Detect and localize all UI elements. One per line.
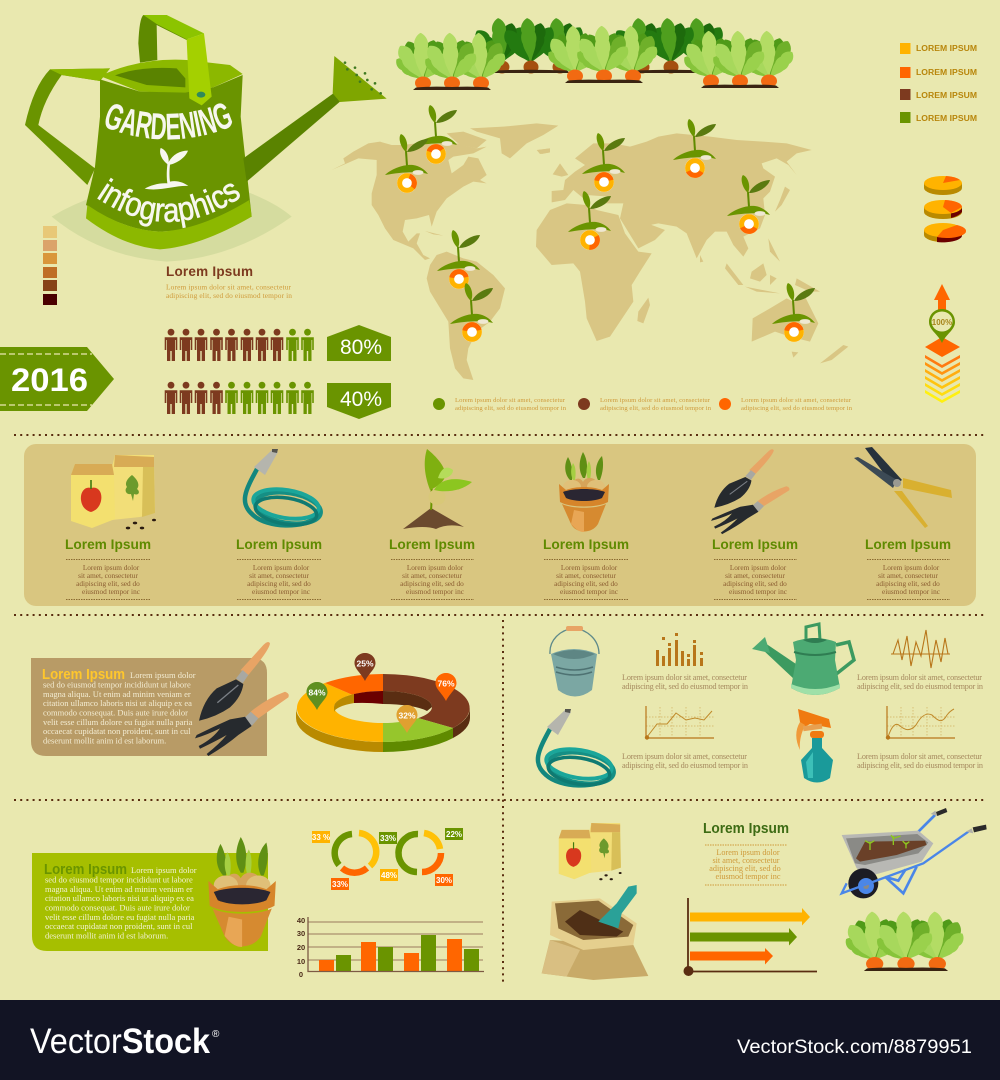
banner: 2016: 2016 bbox=[11, 362, 88, 398]
text block: lorem ipsum brown: Lorem ipsum dolor sit amet, consectetur bbox=[166, 282, 292, 292]
text: row 2 column 2: adipiscing elit, sed do eiusmod tempor in bbox=[857, 761, 983, 770]
footer bar: VectorStock.com/8879951 bbox=[737, 1037, 972, 1058]
gauge arrow with 100% pin: 100% bbox=[932, 318, 952, 327]
map legend: adipiscing elit, sed do eiusmod tempor in bbox=[741, 405, 853, 412]
label group 1: adipiscing elit, sed do bbox=[76, 579, 140, 588]
panel: brown text card: Lorem Ipsum bbox=[42, 667, 125, 683]
label group 1 bbox=[65, 536, 151, 600]
banner: 2016 bbox=[0, 347, 114, 411]
chart: mini zigzag line bbox=[891, 630, 950, 668]
panel: green text card: deserunt mollit anim id est laborum. bbox=[45, 930, 168, 940]
panel: brown text card: commodo consequat. Duis aute irure dolor bbox=[43, 708, 188, 718]
map legend: Lorem ipsum dolor sit amet, consectetur bbox=[741, 397, 852, 404]
icon: seed packets small bbox=[559, 823, 622, 880]
tag: 30% orange: 30% bbox=[436, 876, 452, 885]
chart: bar chart: 30 bbox=[297, 929, 305, 938]
panel: green text card: occaecat cupidatat non proident, sunt in cul bbox=[45, 921, 193, 931]
map legend: adipiscing elit, sed do eiusmod tempor in bbox=[600, 405, 712, 412]
text: row 2 column 1 bbox=[622, 752, 748, 770]
icon: trowel and fork large bbox=[195, 642, 289, 756]
text: row 1 column 2: adipiscing elit, sed do eiusmod tempor in bbox=[857, 682, 983, 691]
label group 6 bbox=[865, 536, 951, 600]
legend: colour key: LOREM IPSUM bbox=[916, 113, 977, 123]
heading: lorem ipsum centre bbox=[703, 821, 789, 885]
pin: 25% bbox=[354, 653, 376, 681]
text: row 1 column 1: adipiscing elit, sed do eiusmod tempor in bbox=[622, 682, 748, 691]
text: row 1 column 2 bbox=[857, 673, 983, 691]
label group 2 bbox=[236, 536, 322, 600]
icon: watering can with title: GARDENING bbox=[106, 103, 232, 140]
icon: potted bulbs large bbox=[208, 837, 276, 947]
label group 4: Lorem ipsum dolor bbox=[561, 563, 618, 572]
chart: bar chart bbox=[297, 916, 484, 979]
text: row 2 column 1: Lorem ipsum dolor sit amet, consectetur bbox=[622, 752, 747, 761]
icon: garden hose small bbox=[538, 709, 616, 789]
tag: 22% green: 22% bbox=[446, 830, 462, 839]
map legend bbox=[433, 397, 853, 412]
gauge arrow with 100% pin bbox=[925, 284, 960, 403]
stacked 3D pies bbox=[924, 176, 966, 242]
panel: green text card bbox=[32, 853, 268, 951]
label group 5: Lorem ipsum dolor bbox=[730, 563, 787, 572]
pictogram row 40% bbox=[165, 382, 391, 419]
text: row 1 column 2: Lorem ipsum dolor sit amet, consectetur bbox=[857, 673, 982, 682]
chart: arrow bars bbox=[684, 898, 817, 976]
panel: green text card: Lorem ipsum dolor bbox=[131, 865, 197, 875]
text block: lorem ipsum brown: Lorem Ipsum bbox=[166, 264, 253, 279]
label group 3: sit amet, consectetur bbox=[402, 571, 462, 580]
icon: garden hose bbox=[245, 449, 323, 529]
label group 3: Lorem ipsum dolor bbox=[407, 563, 464, 572]
heading: lorem ipsum centre: eiusmod tempor inc bbox=[715, 872, 781, 881]
footer bar: VectorStock bbox=[30, 1022, 210, 1061]
label group 5 bbox=[712, 536, 798, 600]
pin: 84%: 84% bbox=[308, 688, 326, 698]
label group 4: eiusmod tempor inc bbox=[560, 587, 619, 596]
pin: 84% bbox=[306, 682, 328, 710]
icon: trowel and fork bbox=[711, 449, 789, 534]
chart: bar chart: 10 bbox=[297, 957, 305, 966]
world map bbox=[332, 123, 848, 380]
tag: 33 % yellow: 33 % bbox=[312, 833, 330, 842]
icon: green watering can bbox=[752, 624, 854, 695]
pin: 76% bbox=[436, 673, 456, 701]
pin: 32% bbox=[396, 705, 418, 733]
icon: wheelbarrow bbox=[842, 808, 987, 898]
label group 3: eiusmod tempor inc bbox=[406, 587, 465, 596]
tag: 48% yellow: 48% bbox=[381, 871, 397, 880]
map sprout markers bbox=[385, 105, 815, 342]
chart: progress ring left bbox=[312, 831, 397, 890]
label group 5: sit amet, consectetur bbox=[725, 571, 785, 580]
icon: watering can with title bbox=[25, 15, 386, 262]
label group 6: eiusmod tempor inc bbox=[882, 587, 941, 596]
top carrot rows bbox=[393, 17, 797, 90]
pin: 25%: 25% bbox=[356, 658, 374, 668]
panel: green text card: sed do eiusmod tempor incididunt ut labore bbox=[45, 874, 193, 884]
chart: bar chart: 40 bbox=[297, 916, 305, 925]
panel: tools band bbox=[24, 444, 976, 606]
panel: brown text card: magna aliqua. Ut enim ad minim veniam er bbox=[43, 689, 191, 699]
label group 5: adipiscing elit, sed do bbox=[723, 579, 787, 588]
panel: brown text card: deserunt mollit anim id est laborum. bbox=[43, 736, 166, 746]
label group 5: Lorem Ipsum bbox=[712, 536, 798, 552]
legend: colour key: LOREM IPSUM bbox=[916, 90, 977, 100]
map legend: Lorem ipsum dolor sit amet, consectetur bbox=[600, 397, 711, 404]
legend: colour key: LOREM IPSUM bbox=[916, 43, 977, 53]
icon: young sprout bbox=[403, 449, 472, 529]
label group 6: adipiscing elit, sed do bbox=[876, 579, 940, 588]
heading: lorem ipsum centre: adipiscing elit, sed do bbox=[709, 864, 781, 873]
panel: brown text card: occaecat cupidatat non proident, sunt in cul bbox=[43, 726, 191, 736]
text: row 1 column 1 bbox=[622, 673, 748, 691]
label group 2: Lorem Ipsum bbox=[236, 536, 322, 552]
label group 4: Lorem Ipsum bbox=[543, 536, 629, 552]
icon: spray bottle bbox=[796, 709, 833, 782]
pin: 76%: 76% bbox=[437, 678, 455, 688]
icon: carrots row bottom right bbox=[842, 911, 968, 971]
icon: metal bucket bbox=[550, 626, 599, 696]
label group 4: adipiscing elit, sed do bbox=[554, 579, 618, 588]
text: row 1 column 1: Lorem ipsum dolor sit amet, consectetur bbox=[622, 673, 747, 682]
footer bar: ® bbox=[212, 1029, 220, 1040]
label group 4 bbox=[543, 536, 629, 600]
label group 4: sit amet, consectetur bbox=[556, 571, 616, 580]
legend: colour key bbox=[900, 43, 977, 123]
label group 3: adipiscing elit, sed do bbox=[400, 579, 464, 588]
map legend: adipiscing elit, sed do eiusmod tempor in bbox=[455, 405, 567, 412]
label group 1: Lorem ipsum dolor bbox=[83, 563, 140, 572]
chart: progress ring right bbox=[380, 828, 463, 886]
panel: brown text card: velit esse cillum dolore eu fugiat nulla paria bbox=[43, 717, 193, 727]
panel: brown text card: sed do eiusmod tempor incididunt ut labore bbox=[43, 680, 191, 690]
icon: soil sack with scoop bbox=[542, 885, 648, 980]
text block: lorem ipsum brown bbox=[166, 264, 292, 300]
icon: watering can with title: infographics bbox=[97, 178, 240, 228]
legend: colour key: LOREM IPSUM bbox=[916, 67, 977, 77]
pictogram row 80%: 80% bbox=[340, 336, 382, 359]
chart: line chart left bbox=[645, 706, 714, 740]
map legend: Lorem ipsum dolor sit amet, consectetur bbox=[455, 397, 566, 404]
panel: green text card: commodo consequat. Duis aute irure dolor bbox=[45, 902, 190, 912]
heading: lorem ipsum centre: Lorem ipsum dolor bbox=[716, 848, 780, 857]
icon: potted bulbs bbox=[559, 452, 609, 532]
text: row 2 column 2: Lorem ipsum dolor sit amet, consectetur bbox=[857, 752, 982, 761]
panel: green text card: velit esse cillum dolore eu fugiat nulla paria bbox=[45, 912, 195, 922]
label group 2: eiusmod tempor inc bbox=[252, 587, 311, 596]
icon: garden shears bbox=[854, 447, 952, 528]
label group 6: Lorem Ipsum bbox=[865, 536, 951, 552]
text: row 2 column 1: adipiscing elit, sed do eiusmod tempor in bbox=[622, 761, 748, 770]
label group 6: sit amet, consectetur bbox=[878, 571, 938, 580]
label group 1: sit amet, consectetur bbox=[78, 571, 138, 580]
pin: 32%: 32% bbox=[398, 710, 416, 720]
tag: 33% green: 33% bbox=[380, 834, 396, 843]
colour swatches bbox=[43, 226, 57, 305]
text: row 2 column 2 bbox=[857, 752, 983, 770]
label group 6: Lorem ipsum dolor bbox=[883, 563, 940, 572]
icon: seed packets bbox=[71, 455, 156, 529]
footer bar bbox=[0, 1000, 1000, 1080]
panel: brown text card bbox=[31, 658, 267, 756]
label group 3 bbox=[389, 536, 475, 600]
chart: bar chart: 20 bbox=[297, 943, 305, 952]
chart: line chart right bbox=[886, 706, 955, 740]
panel: green text card: Lorem Ipsum bbox=[44, 862, 127, 878]
pictogram row 40%: 40% bbox=[340, 388, 382, 411]
label group 2: sit amet, consectetur bbox=[249, 571, 309, 580]
label group 2: adipiscing elit, sed do bbox=[247, 579, 311, 588]
label group 3: Lorem Ipsum bbox=[389, 536, 475, 552]
label group 5: eiusmod tempor inc bbox=[729, 587, 788, 596]
panel: green text card: citation ullamco laboris nisi ut aliquip ex ea bbox=[45, 893, 194, 903]
panel: brown text card: citation ullamco laboris nisi ut aliquip ex ea bbox=[43, 698, 192, 708]
tag: 33% orange: 33% bbox=[332, 880, 348, 889]
chart: bar chart: 0 bbox=[299, 970, 303, 979]
panel: brown text card: Lorem ipsum dolor bbox=[130, 670, 196, 680]
chart: mini bar equalizer bbox=[656, 633, 703, 666]
label group 2: Lorem ipsum dolor bbox=[253, 563, 310, 572]
chart: 3D donut bbox=[296, 653, 470, 752]
panel: green text card: magna aliqua. Ut enim ad minim veniam er bbox=[45, 884, 193, 894]
pictogram row 80% bbox=[165, 325, 391, 361]
label group 1: Lorem Ipsum bbox=[65, 536, 151, 552]
heading: lorem ipsum centre: sit amet, consectetur bbox=[712, 856, 780, 865]
label group 1: eiusmod tempor inc bbox=[82, 587, 141, 596]
heading: lorem ipsum centre: Lorem Ipsum bbox=[703, 821, 789, 837]
text block: lorem ipsum brown: adipiscing elit, sed do eiusmod tempor in bbox=[166, 291, 292, 300]
